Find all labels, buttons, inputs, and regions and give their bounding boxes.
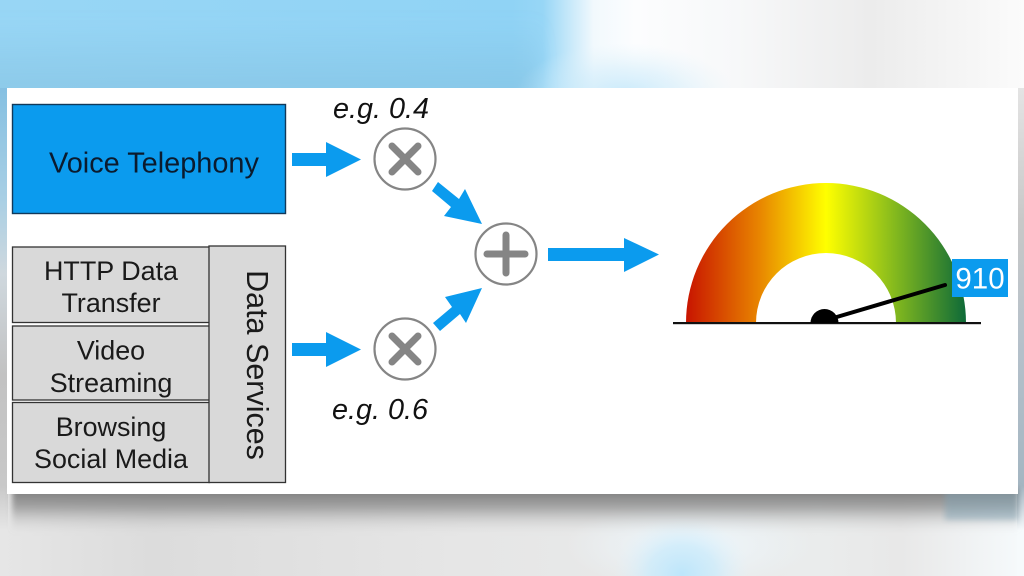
arrow: lower multiply to plus [433, 288, 482, 331]
box: HTTP data transfer: Transfer [61, 288, 161, 318]
box: HTTP data transfer [12, 247, 210, 322]
weight label: 0.4: e.g. 0.4 [333, 93, 429, 125]
operator: lower multiply [374, 318, 436, 380]
gauge [673, 183, 1008, 324]
operator: plus [476, 224, 536, 284]
operator: upper multiply [374, 128, 436, 190]
box: browsing social media [12, 402, 210, 482]
box: data services label: Data Services [240, 270, 274, 460]
score label: 910 [955, 262, 1005, 296]
gauge baseline [673, 322, 981, 324]
gauge arc [686, 183, 966, 323]
panel: data services [12, 246, 286, 482]
box: video streaming: Video [77, 336, 145, 366]
white panel [7, 88, 1018, 494]
box: video streaming [12, 326, 210, 400]
box: browsing social media: Browsing [56, 412, 166, 442]
box: HTTP data transfer: HTTP Data [44, 256, 178, 286]
arrow: data to multiply [292, 332, 361, 367]
arrow: upper multiply to plus [432, 182, 482, 224]
box: voice telephony [12, 104, 286, 214]
arrow: plus to gauge [548, 238, 659, 272]
box: video streaming: Streaming [50, 368, 172, 398]
gauge needle [830, 285, 945, 319]
box: data services label [209, 246, 286, 482]
box: voice telephony: Voice Telephony [49, 148, 259, 180]
arrow: voice to multiply [292, 142, 361, 177]
weight label: 0.6: e.g. 0.6 [332, 394, 429, 426]
box: browsing social media: Social Media [34, 444, 188, 474]
gauge hub [810, 309, 838, 323]
